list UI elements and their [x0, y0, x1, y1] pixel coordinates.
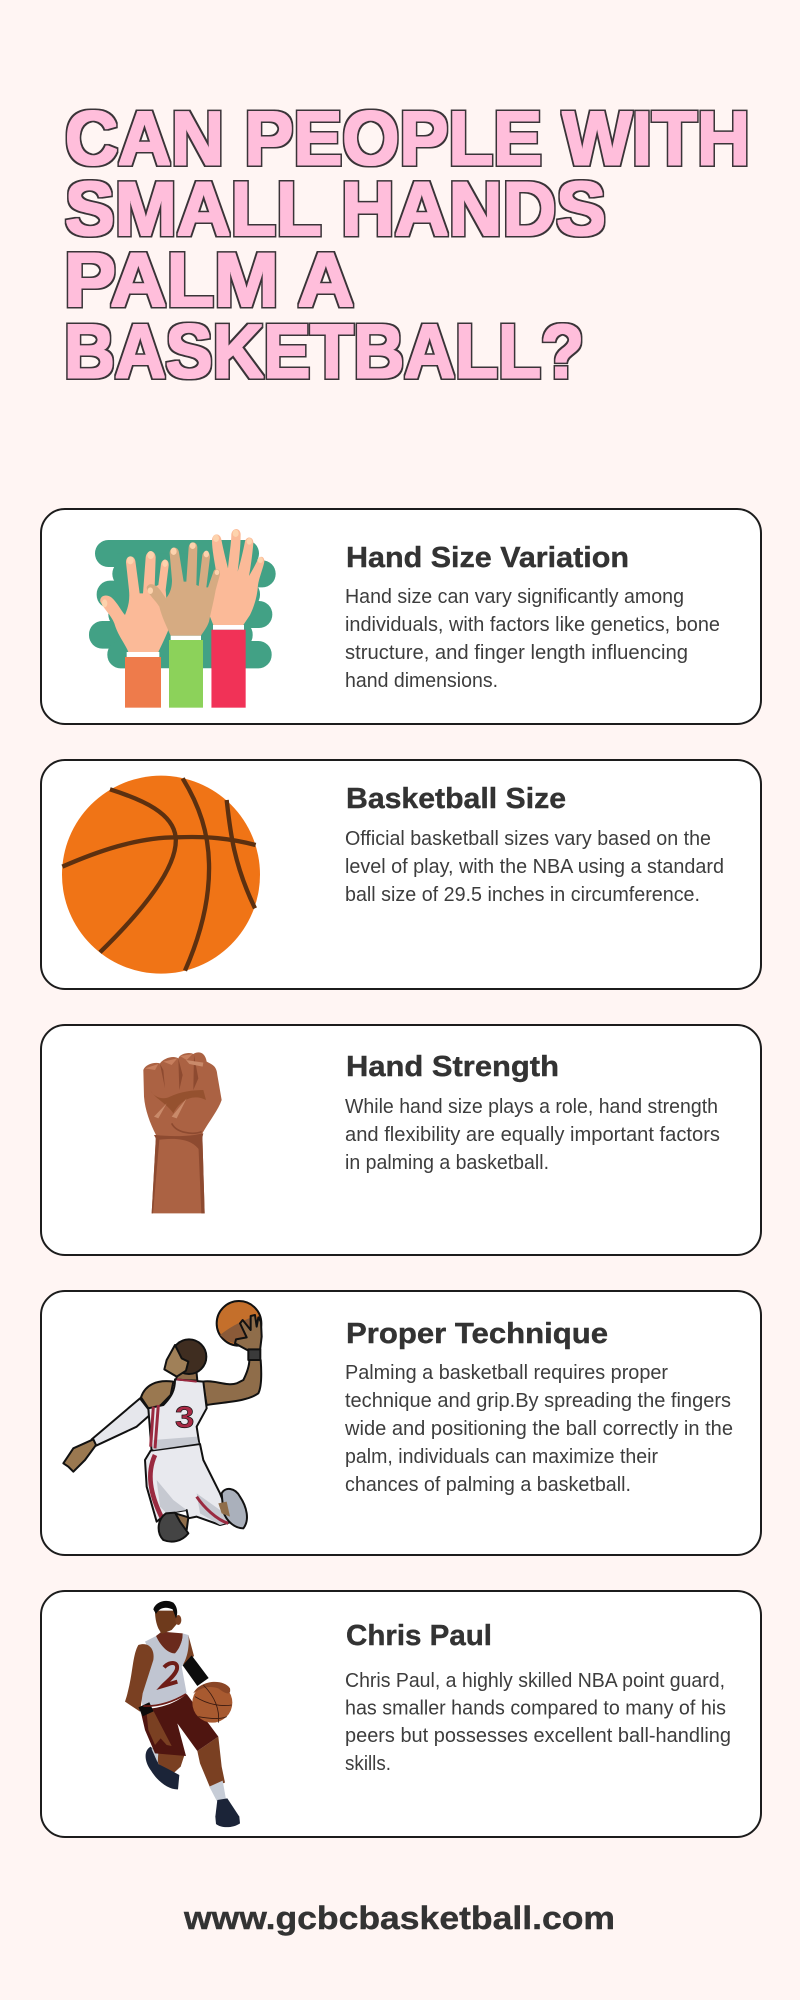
text block: level of play, with the NBA using a standard [345, 855, 724, 878]
ball and raised hand [217, 1301, 261, 1346]
text block: and flexibility are equally important factors [345, 1123, 720, 1146]
icon: basketball [62, 776, 260, 974]
text block [345, 585, 720, 692]
text block: While hand size plays a role, hand strength [345, 1095, 718, 1118]
title [64, 96, 750, 394]
panel: hand size variation [41, 509, 761, 724]
text block: hand dimensions. [345, 669, 498, 692]
heading: Proper Technique [346, 1318, 608, 1350]
text block: Chris Paul, a highly skilled NBA point guard, [345, 1669, 725, 1692]
title: PALM A [64, 238, 354, 323]
icon: dribbling player [125, 1601, 240, 1827]
heading: Chris Paul [346, 1620, 492, 1652]
icon: raised hands [89, 529, 276, 708]
text block: palm, individuals can maximize their [345, 1445, 658, 1468]
far arm [92, 1398, 152, 1446]
title: BASKETBALL? [64, 310, 584, 394]
text block: ball size of 29.5 inches in circumference. [345, 883, 700, 906]
footer url: www.gcbcbasketball.com [183, 1900, 615, 1936]
panel: hand strength [41, 1025, 761, 1255]
icon: dunking player: 3 [175, 1400, 194, 1434]
icon: raised fist [143, 1052, 222, 1213]
text block [345, 1095, 720, 1174]
title: CAN PEOPLE WITH [65, 96, 750, 182]
jersey [148, 1379, 207, 1452]
text block: has smaller hands compared to many of his [345, 1696, 726, 1720]
text block: chances of palming a basketball. [345, 1473, 631, 1496]
heading: Basketball Size [346, 783, 566, 815]
icon: dunking player [63, 1301, 262, 1542]
text block: Official basketball sizes vary based on the [345, 827, 711, 850]
text block: Palming a basketball requires proper [345, 1361, 668, 1384]
text block: structure, and finger length influencing [345, 641, 688, 664]
text block [345, 1669, 731, 1775]
heading: Hand Size Variation [346, 542, 629, 574]
head [176, 1367, 197, 1381]
text block [345, 827, 724, 906]
panel: basketball size [41, 760, 761, 989]
text block: individuals, with factors like genetics, bone [345, 613, 720, 636]
text block: peers but possesses excellent ball-handling [345, 1724, 731, 1747]
text block [344, 1361, 733, 1496]
shorts [145, 1444, 233, 1525]
heading: Hand Strength [346, 1051, 559, 1083]
text block: skills. [345, 1752, 391, 1775]
legs and shoes [175, 1513, 188, 1537]
text block: technique and grip.By spreading the fingers [345, 1389, 731, 1412]
panel: proper technique [41, 1291, 761, 1555]
text block: wide and positioning the ball correctly in the [344, 1417, 733, 1440]
title: SMALL HANDS [65, 167, 606, 252]
text block: Hand size can vary significantly among [345, 585, 684, 608]
text block: in palming a basketball. [345, 1151, 549, 1174]
panel: chris paul [41, 1591, 761, 1837]
